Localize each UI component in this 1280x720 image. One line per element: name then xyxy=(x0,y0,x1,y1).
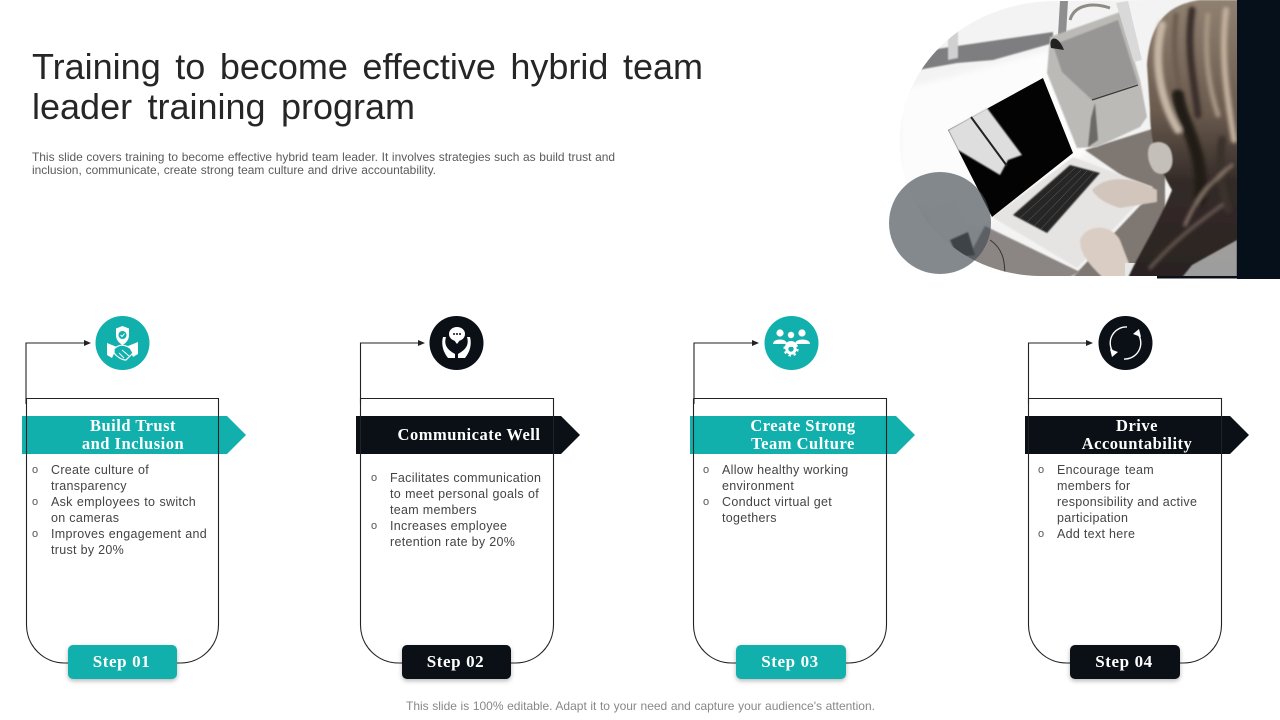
banner: drive accountability: Accountability xyxy=(1082,434,1192,453)
banner: create strong team culture xyxy=(690,416,915,454)
bullet list xyxy=(371,471,541,549)
description text: This slide covers training to become effective hybrid team leader. It involves strategies such as build trust and xyxy=(32,150,615,164)
bullet list: to meet personal goals of xyxy=(390,487,539,501)
photo: woman working on a laptop xyxy=(889,0,1280,279)
bullet list: Improves engagement and xyxy=(51,527,207,541)
panel: step 4 drive accountability xyxy=(1025,316,1249,684)
bullet list: Increases employee xyxy=(390,519,507,533)
bullet list: on cameras xyxy=(51,511,119,525)
bullet list xyxy=(1038,463,1197,541)
card outline with arrow xyxy=(360,340,554,664)
bullet list: Encourage team xyxy=(1057,463,1154,477)
laptop xyxy=(992,157,1153,268)
banner: build trust and inclusion: and Inclusion xyxy=(82,434,184,453)
panel: step 3 create strong team culture xyxy=(690,316,915,684)
bullet list xyxy=(32,463,207,557)
bullet list: o xyxy=(32,496,38,508)
title xyxy=(32,46,703,127)
bullet list: Add text here xyxy=(1057,527,1135,541)
bullet list: Allow healthy working xyxy=(722,463,848,477)
bullet list: o xyxy=(703,496,709,508)
banner: build trust and inclusion xyxy=(22,416,246,454)
bullet list: Create culture of xyxy=(51,463,149,477)
bullet list: participation xyxy=(1057,511,1128,525)
bullet list: Ask employees to switch xyxy=(51,495,196,509)
bullet list: environment xyxy=(722,479,794,493)
bullet list: o xyxy=(32,528,38,540)
icon: refresh arrows xyxy=(1098,316,1152,370)
step label xyxy=(68,645,177,679)
banner: communicate well: Communicate Well xyxy=(398,425,540,444)
banner: drive accountability xyxy=(1025,416,1249,454)
title: Training to become effective hybrid team xyxy=(32,46,703,87)
bullet list: o xyxy=(703,464,709,476)
step label xyxy=(402,645,511,679)
bullet list: responsibility and active xyxy=(1057,495,1197,509)
bag xyxy=(1047,12,1147,148)
step label: Step 01 xyxy=(93,652,150,671)
hair xyxy=(1127,0,1240,280)
bullet list: o xyxy=(371,520,377,532)
title: leader training program xyxy=(32,86,415,127)
banner: drive accountability: Drive xyxy=(1116,416,1158,435)
bullet list: Conduct virtual get xyxy=(722,495,832,509)
window detail under the circle xyxy=(925,200,972,248)
icon: shield and handshake xyxy=(96,316,150,370)
bullet list: Facilitates communication xyxy=(390,471,541,485)
step label xyxy=(1070,645,1180,679)
step label: Step 02 xyxy=(427,652,484,671)
banner: build trust and inclusion: Build Trust xyxy=(90,416,176,435)
bullet list: o xyxy=(32,464,38,476)
bullet list: transparency xyxy=(51,479,127,493)
icon: team and gear xyxy=(764,316,818,370)
bullet list: trust by 20% xyxy=(51,543,124,557)
bullet list: o xyxy=(1038,528,1044,540)
table xyxy=(1070,125,1165,280)
icon: hands holding speech bubble xyxy=(430,316,484,370)
bullet list xyxy=(703,463,848,525)
bullet list: o xyxy=(371,472,377,484)
translucent circle xyxy=(889,172,991,274)
bullet list: retention rate by 20% xyxy=(390,535,515,549)
banner: communicate well xyxy=(356,416,580,454)
card outline with arrow xyxy=(692,340,888,664)
panel: step 1 build trust xyxy=(22,316,246,684)
step label: Step 03 xyxy=(761,652,819,671)
step label: Step 04 xyxy=(1095,652,1153,671)
panel: step 2 communicate well xyxy=(356,316,580,684)
bullet list: team members xyxy=(390,503,477,517)
bullet list: togethers xyxy=(722,511,777,525)
description text xyxy=(32,150,615,177)
banner: create strong team culture: Team Culture xyxy=(751,434,855,453)
description text: inclusion, communicate, create strong team culture and drive accountability. xyxy=(32,163,436,177)
bullet list: o xyxy=(1038,464,1044,476)
banner: create strong team culture: Create Strong xyxy=(750,416,856,435)
card outline with arrow xyxy=(1028,340,1222,664)
hands xyxy=(1092,179,1157,208)
card outline with arrow xyxy=(25,340,220,664)
footer note: This slide is 100% editable. Adapt it to your need and capture your audience's attention. xyxy=(406,699,875,713)
bullet list: members for xyxy=(1057,479,1130,493)
step label xyxy=(736,645,846,679)
